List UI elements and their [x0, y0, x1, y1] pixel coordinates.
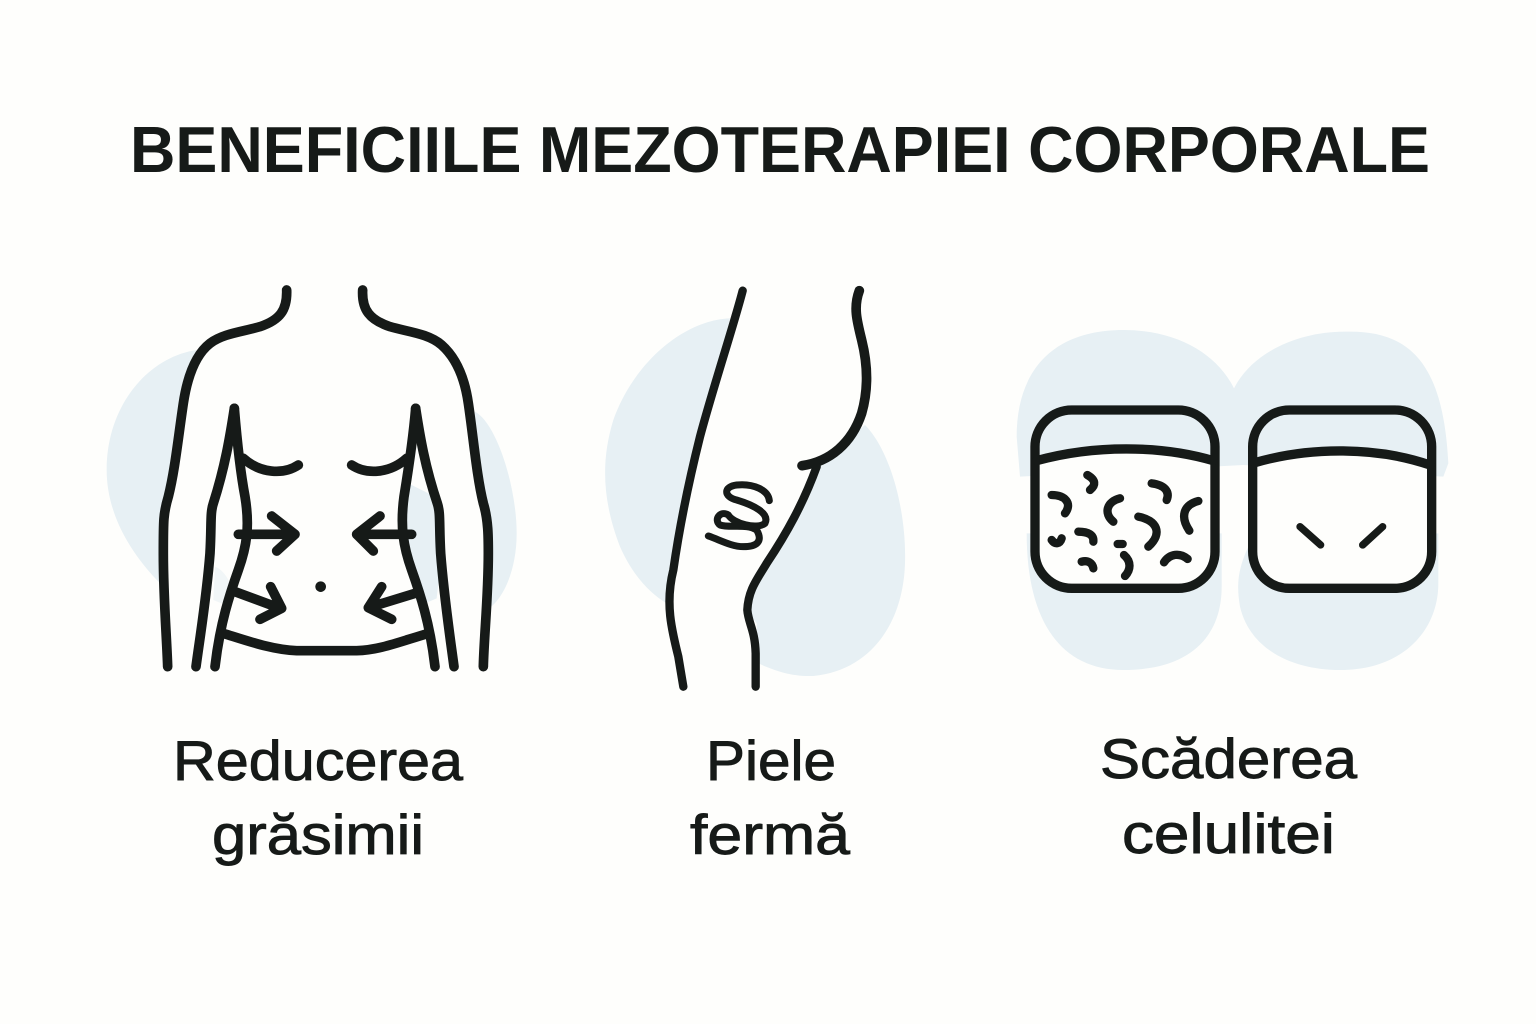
panel: fat reduction [107, 290, 517, 866]
square: after, smooth skin [1253, 410, 1432, 588]
smooth skin marks [1300, 527, 1383, 545]
label: Scăderea celulitei: celulitei [1122, 802, 1335, 865]
spiral mark [708, 485, 769, 547]
background blob [605, 318, 905, 676]
label: Piele fermă [690, 729, 851, 866]
label: Piele fermă: fermă [690, 803, 851, 866]
label: Piele fermă: Piele [706, 729, 836, 792]
square: before, with cellulite [1035, 410, 1215, 588]
panel: cellulite reduction [1017, 330, 1448, 865]
navel [315, 581, 326, 592]
icon: skin comparison squares [1017, 330, 1448, 670]
icon: body profile with spiral [605, 291, 905, 687]
title: BENEFICIILE MEZOTERAPIEI CORPORALE [130, 113, 1430, 186]
label: Scăderea celulitei: Scăderea [1100, 727, 1358, 790]
body outline [163, 290, 488, 667]
background blob [107, 350, 517, 610]
profile outline [669, 291, 867, 687]
cellulite dimples [1052, 475, 1198, 576]
icon: torso with inward arrows [107, 290, 517, 667]
label: Scăderea celulitei [1100, 727, 1358, 865]
label: Reducerea grăsimii [173, 729, 464, 866]
arrows pointing inward [235, 516, 415, 619]
label: Reducerea grăsimii: grăsimii [212, 803, 424, 866]
label: Reducerea grăsimii: Reducerea [173, 729, 464, 792]
panel: firm skin [605, 291, 905, 866]
background blob [1017, 330, 1448, 670]
